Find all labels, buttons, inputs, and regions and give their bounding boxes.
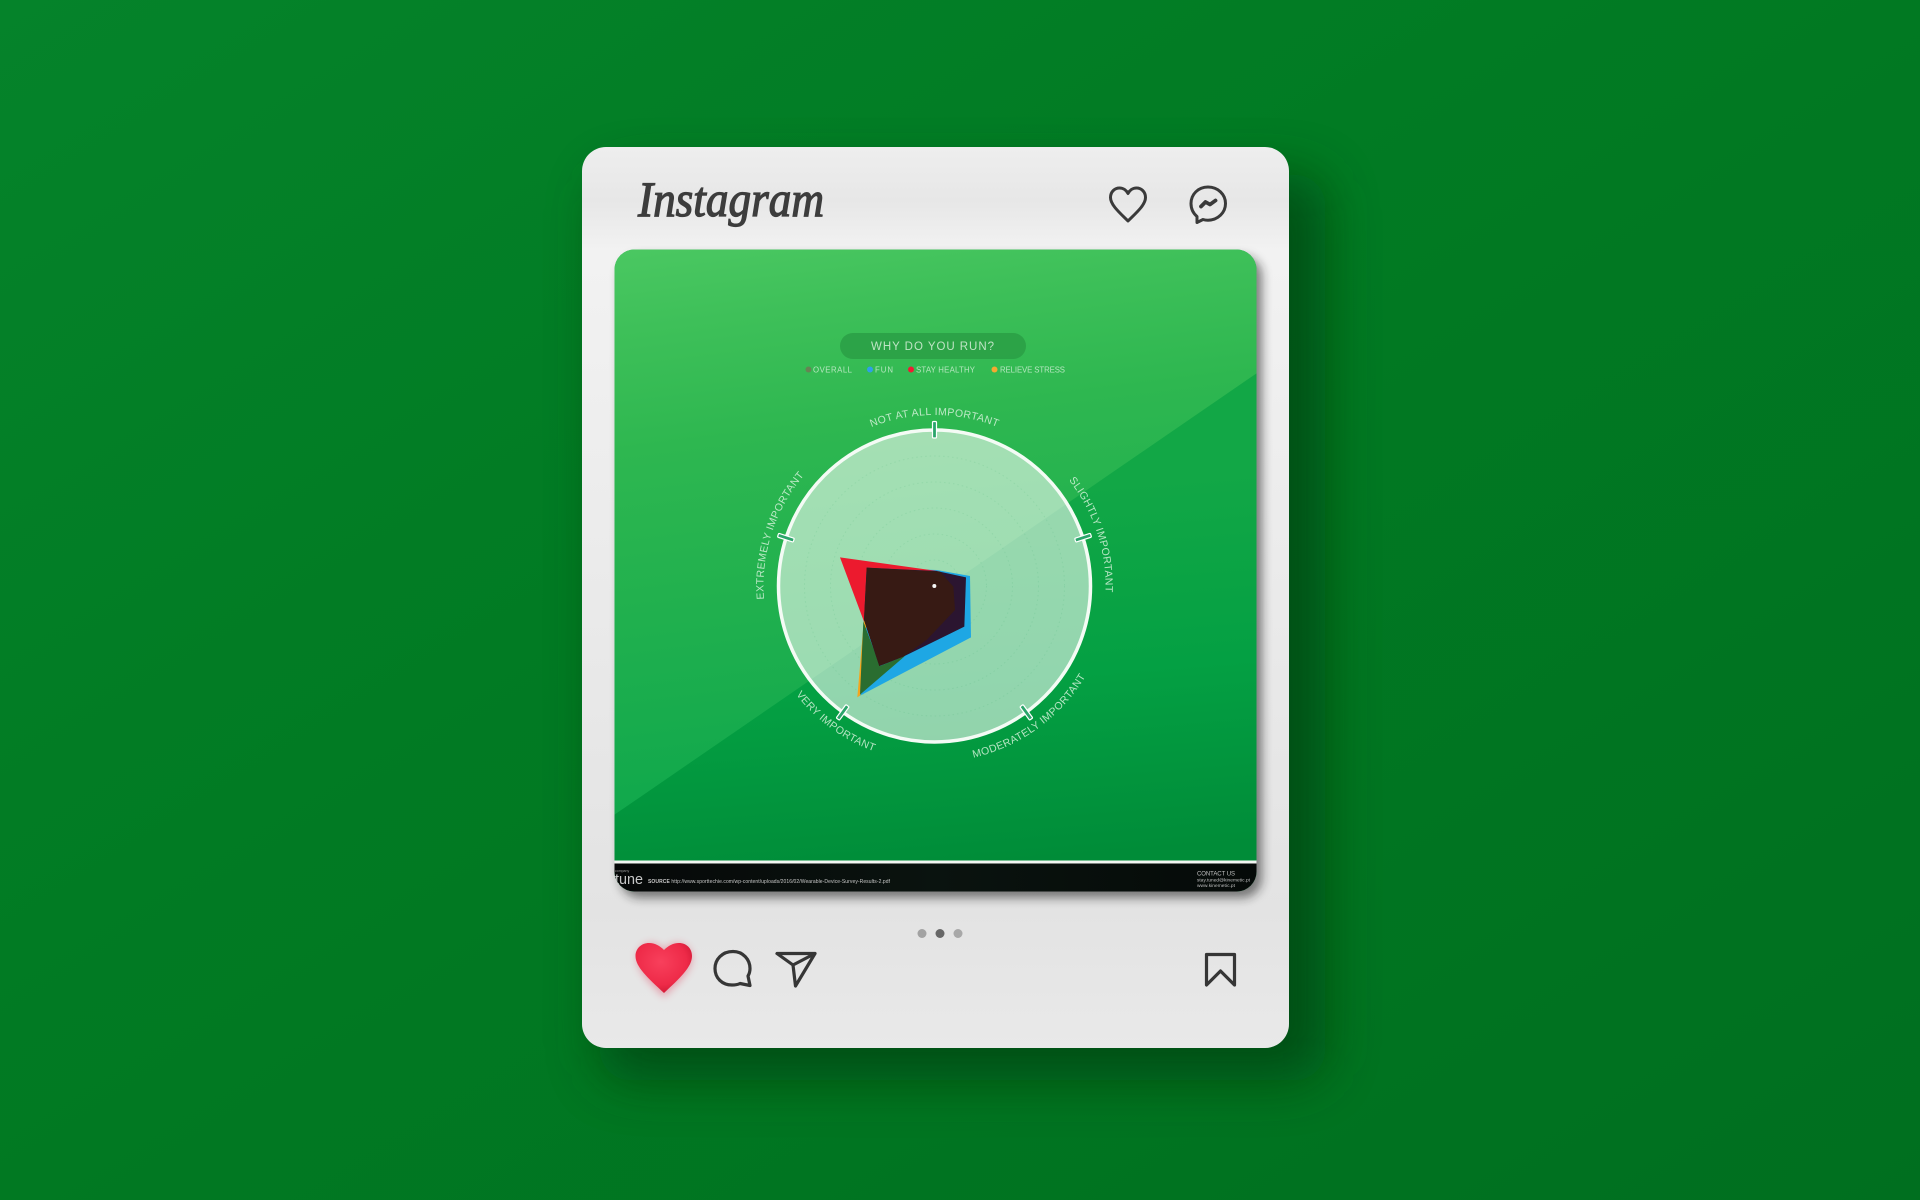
axis labels: EXTREMELY IMPORTANT bbox=[756, 470, 802, 599]
card shadow bbox=[600, 175, 1325, 1080]
glossy diagonal highlight bbox=[614, 249, 1257, 815]
series: overlap navy bbox=[864, 568, 966, 666]
brand mark bbox=[615, 870, 642, 884]
legend item: stay healthy: STAY HEALTHY bbox=[916, 366, 976, 374]
icon: comment bbox=[715, 952, 750, 986]
legend item: overall bbox=[806, 366, 852, 372]
image shadow bbox=[620, 256, 1262, 898]
source text: SOURCE http://www.sporttechie.com/wp-content/uploads/2016/02/Wearable-Device-Survey-Results-2.pdf bbox=[648, 879, 891, 885]
carousel dots bbox=[918, 929, 962, 938]
footer strip bbox=[614, 860, 1257, 892]
title pill: WHY DO YOU RUN? bbox=[871, 341, 994, 353]
legend item: fun: FUN bbox=[875, 366, 893, 374]
icon: notification heart bbox=[1110, 188, 1146, 221]
axis labels bbox=[756, 408, 1113, 758]
axis labels: NOT AT ALL IMPORTANT bbox=[870, 408, 1000, 427]
legend item: relieve stress: RELIEVE STRESS bbox=[1000, 366, 1065, 374]
instagram logo: Instagram bbox=[637, 171, 824, 227]
legend item: overall: OVERALL bbox=[813, 366, 853, 374]
centre point bbox=[932, 584, 936, 588]
axis labels: VERY IMPORTANT bbox=[798, 690, 876, 750]
icon: liked red heart bbox=[636, 943, 692, 997]
radar disc bbox=[778, 430, 1090, 742]
series: relieve stress bbox=[857, 618, 867, 697]
contact: CONTACT US bbox=[1197, 872, 1235, 878]
radar series shapes bbox=[840, 557, 971, 697]
axis ticks bbox=[777, 422, 1092, 720]
series: stay healthy bbox=[840, 557, 940, 622]
series: overall overlap brown bbox=[864, 568, 955, 666]
contact: www.kinemetic.pt bbox=[1197, 883, 1236, 889]
legend item: relieve stress bbox=[992, 366, 1065, 372]
contact bbox=[1197, 872, 1251, 889]
axis labels: SLIGHTLY IMPORTANT bbox=[1070, 477, 1113, 592]
series: fun bbox=[859, 568, 971, 696]
brand mark: tune bbox=[615, 871, 643, 888]
brand mark: company bbox=[615, 869, 629, 873]
axis labels: MODERATELY IMPORTANT bbox=[972, 672, 1084, 758]
radar chart bbox=[756, 408, 1113, 758]
legend item: fun bbox=[867, 366, 892, 372]
series: green overlap bbox=[860, 622, 905, 695]
icon: messenger bbox=[1191, 187, 1226, 222]
panel: infographic image bbox=[614, 250, 1256, 892]
icon: bookmark bbox=[1206, 954, 1234, 985]
title pill bbox=[840, 333, 1026, 359]
contact: stay.tuned@kinemetic.pt bbox=[1197, 878, 1251, 884]
panel: instagram post card bbox=[582, 147, 1289, 1048]
icon: share bbox=[777, 954, 815, 986]
legend bbox=[806, 366, 1065, 372]
legend item: stay healthy bbox=[908, 366, 975, 372]
